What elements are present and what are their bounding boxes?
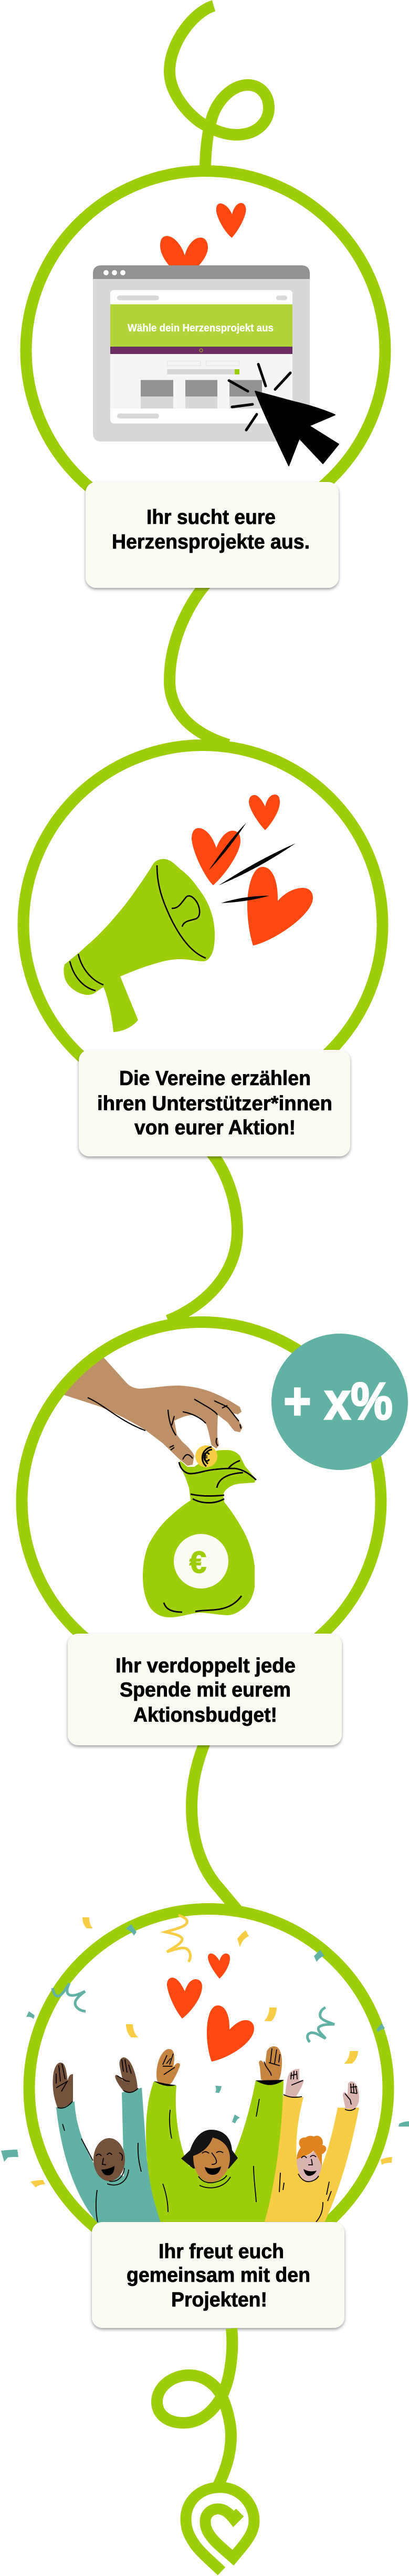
person: teal (53, 2057, 163, 2224)
vine: top curl (170, 6, 269, 170)
ring 1 (26, 171, 385, 530)
badge: plus x percent: + x% (284, 1372, 393, 1431)
ring 2 (23, 745, 382, 1104)
icon: hearts (192, 795, 313, 946)
card 4: Projekten! (171, 2289, 267, 2311)
card 3: Aktionsbudget! (133, 1704, 277, 1726)
icon: heart behind browser (160, 236, 208, 278)
card 2 (79, 1050, 350, 1156)
card 4: gemeinsam mit den (127, 2264, 310, 2287)
browser window (93, 265, 310, 442)
vine: bottom loop (157, 2328, 232, 2488)
person: green (146, 2046, 284, 2224)
section 2: megaphone (23, 745, 382, 1104)
card 3: Spende mit eurem (120, 1679, 291, 1701)
icon: sound lines (209, 823, 296, 903)
card 1 (86, 482, 339, 588)
euro on bag: € (190, 1545, 206, 1580)
card 4 (92, 2222, 344, 2328)
badge: plus x percent (271, 1334, 408, 1470)
section 3: donation (22, 1322, 408, 1681)
ring 3 (22, 1322, 381, 1681)
vine: link 1 to 2 (170, 582, 228, 745)
card 2: von eurer Aktion! (134, 1117, 296, 1139)
icon: cursor with click ticks (229, 364, 339, 466)
card 3 (68, 1634, 342, 1745)
icon: money bag (143, 1450, 256, 1617)
logo: heart spiral (186, 2487, 254, 2571)
vine: link 3 to 4 (192, 1740, 237, 1910)
card 1: Herzensprojekte aus. (112, 531, 310, 553)
icon: coin (195, 1445, 217, 1467)
person: yellow (263, 2069, 359, 2224)
icon: small heart (216, 203, 246, 238)
card 4: Ihr freut euch (159, 2240, 284, 2263)
ring 4 (29, 1909, 389, 2268)
vine: link 2 to 3 (168, 1151, 237, 1321)
confetti (1, 1915, 409, 2187)
section 1: select projects (26, 171, 385, 530)
icon: coin: € (203, 1449, 210, 1465)
section 4: celebration (1, 1909, 409, 2268)
card 2: ihren Unterstützer*innen (97, 1092, 332, 1115)
icon: hand (55, 1353, 243, 1466)
card 1: Ihr sucht eure (146, 506, 276, 529)
icon: hearts (167, 1954, 254, 2062)
card 3: Ihr verdoppelt jede (116, 1655, 296, 1677)
icon: megaphone (64, 859, 215, 1032)
card 2: Die Vereine erzählen (119, 1067, 311, 1090)
browser headline: Wähle dein Herzensprojekt aus (128, 323, 274, 334)
